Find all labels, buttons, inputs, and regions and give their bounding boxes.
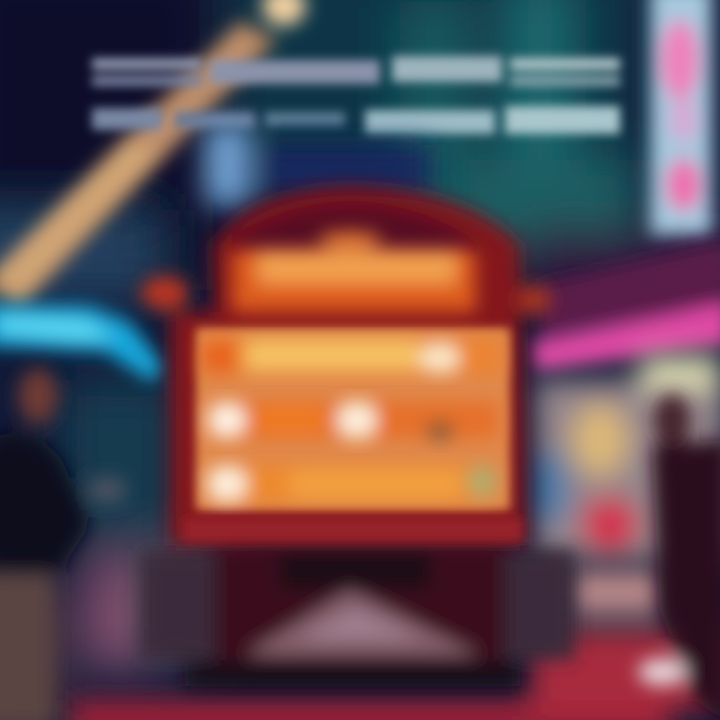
title text block (illegible in reference) xyxy=(92,56,620,134)
booth base xyxy=(140,545,575,686)
menu row 3 xyxy=(207,465,497,503)
menu row 1 xyxy=(203,338,501,374)
cyan neon band xyxy=(0,304,165,382)
booth xyxy=(141,186,551,545)
right shop front xyxy=(535,355,720,560)
blue glow behind booth xyxy=(205,125,430,205)
booth lower edge xyxy=(184,518,522,542)
neon vertical sign xyxy=(650,0,712,235)
magenta neon awning xyxy=(530,240,720,372)
menu panel xyxy=(196,328,510,510)
right person xyxy=(638,394,720,720)
menu row 2 xyxy=(208,401,498,441)
left person xyxy=(0,368,124,720)
diagonal light beam xyxy=(0,0,306,310)
booth frame xyxy=(141,186,551,545)
floor xyxy=(70,570,720,720)
marquee sign xyxy=(232,232,476,312)
